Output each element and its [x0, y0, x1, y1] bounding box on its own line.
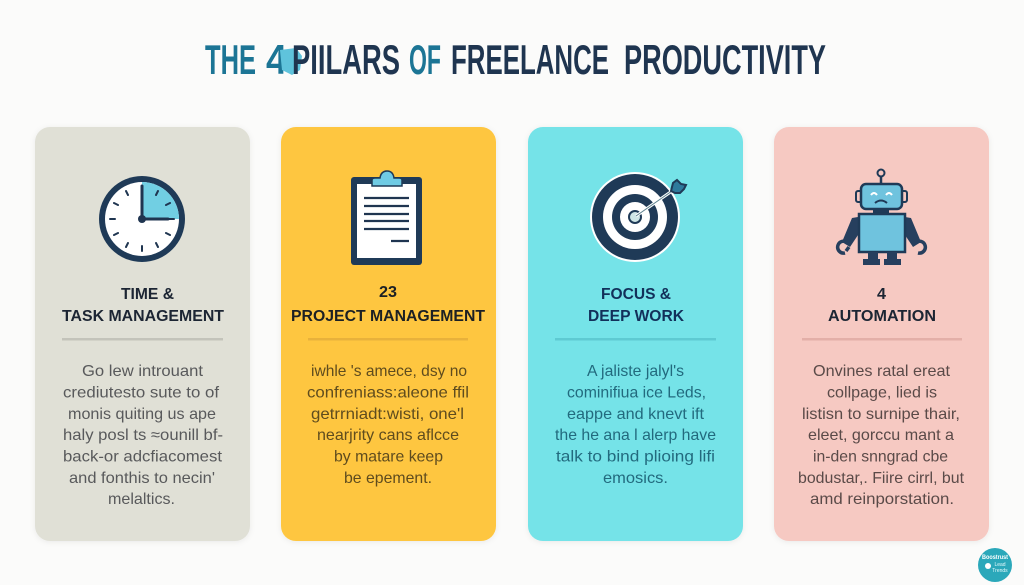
text block: project management: confreniass:aleone ffil	[307, 384, 469, 402]
heading: focus and deep work	[588, 286, 684, 325]
text block: automation: in-den snngrad cbe	[813, 448, 948, 466]
text block: focus and deep work: emosics.	[603, 470, 668, 487]
title: FREELANCE	[451, 36, 609, 83]
text block: project management	[307, 363, 469, 487]
text block: time and task management: melaltics.	[108, 491, 175, 508]
heading: project management: PROJECT MANAGEMENT	[291, 308, 485, 325]
title: PRODUCTIVITY	[624, 36, 826, 83]
title: THE	[205, 36, 256, 83]
text block: project management: iwhle 's amece, dsy no	[311, 363, 467, 380]
text block: focus and deep work: talk to bind plioing lifi	[556, 448, 715, 466]
text block: focus and deep work: A jaliste jalyl's	[587, 363, 684, 380]
icon: robot	[838, 170, 925, 265]
logo badge: Lead	[994, 562, 1006, 568]
text block: automation: Onvines ratal ereat	[813, 363, 951, 380]
logo badge: Boostrust	[982, 555, 1008, 561]
text block: time and task management	[63, 363, 223, 508]
title: 4	[266, 36, 288, 83]
heading: automation: AUTOMATION	[828, 308, 936, 325]
text block: time and task management: monis quiting us ape	[68, 406, 216, 423]
icon: clock	[99, 176, 185, 262]
title: OF	[409, 36, 441, 83]
heading: focus and deep work: FOCUS &	[601, 286, 671, 303]
text block: time and task management: and fonthis to necin'	[69, 470, 215, 487]
text block: project management: be epement.	[344, 470, 432, 487]
icon: clipboard	[351, 171, 422, 265]
text block: project management: nearjrity cans aflcce	[317, 427, 459, 444]
heading: time and task management	[62, 286, 224, 325]
text block: focus and deep work: cominifiua ice Leds,	[567, 384, 706, 402]
icon: target with dart	[590, 172, 686, 262]
text block: automation: eleet, gorccu mant a	[808, 427, 954, 444]
panel: automation	[774, 127, 989, 541]
text block: focus and deep work	[555, 363, 716, 487]
text block: time and task management: haly posl ts ≈ounill bf-	[63, 427, 223, 444]
heading: project management: 23	[379, 284, 397, 301]
text block: automation: bodustar,. Fiire cirrl, but	[798, 470, 965, 487]
title	[205, 36, 826, 83]
title: PIILARS	[292, 36, 400, 83]
panel: time and task management	[35, 127, 250, 541]
heading: automation: 4	[877, 286, 886, 303]
heading: project management	[291, 284, 485, 325]
text block: focus and deep work: the he ana l alerp have	[555, 427, 716, 444]
text block: project management: getrrniadt:wisti, one'l	[311, 406, 464, 423]
panel: focus and deep work	[528, 127, 743, 541]
text block: automation	[798, 363, 965, 508]
text block: time and task management: Go lew introuant	[82, 363, 204, 380]
text block: project management: by matare keep	[334, 448, 443, 466]
logo badge: Trends	[992, 568, 1008, 574]
heading: automation	[828, 286, 936, 325]
text block: automation: amd reinporstation.	[810, 491, 954, 508]
heading: time and task management: TASK MANAGEMENT	[62, 308, 224, 325]
text block: focus and deep work: eappe and knevt ift	[567, 406, 705, 423]
logo badge	[978, 548, 1012, 582]
panel: project management	[281, 127, 496, 541]
text block: time and task management: back-or adcfiacomest	[63, 448, 223, 466]
heading: focus and deep work: DEEP WORK	[588, 308, 684, 325]
text block: automation: listisn to surnipe thair,	[802, 406, 960, 423]
text block: automation: collpage, lied is	[827, 384, 937, 402]
heading: time and task management: TIME &	[121, 286, 174, 303]
text block: time and task management: crediutesto sute to of	[63, 384, 220, 402]
